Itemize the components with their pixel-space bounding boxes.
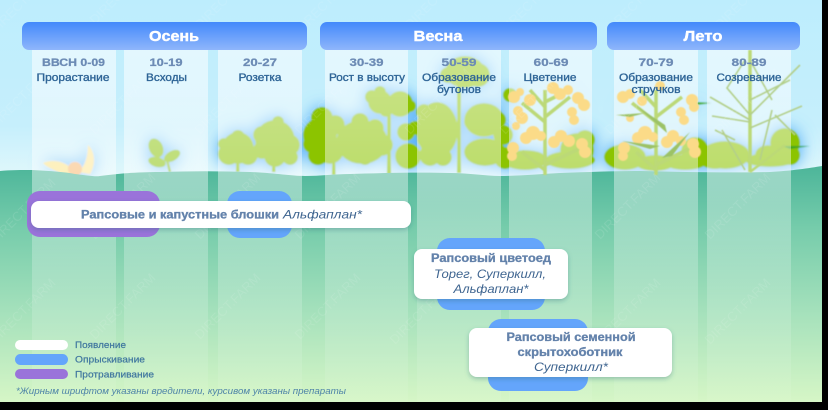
season header: spring: Весна <box>414 28 463 45</box>
pest bar: flea beetles <box>27 191 411 238</box>
watermarks: DIRECT.FARM <box>402 65 473 137</box>
plant: stem growth <box>303 86 422 175</box>
season header: summer: Лето <box>684 28 722 45</box>
stage label: 0-09: Прорастание <box>36 72 110 84</box>
watermarks: DIRECT.FARM <box>87 65 158 137</box>
pest bar: flea beetles: Альфаплан* <box>282 208 362 222</box>
stage label: 60-69 <box>524 57 576 84</box>
legend: Опрыскивание <box>75 354 145 366</box>
pest bar: pollen beetle: Торег, Суперкилл, <box>434 267 546 281</box>
stage label: 80-89 <box>716 57 782 84</box>
watermarks: DIRECT.FARM <box>702 170 773 242</box>
stage label: 70-79 <box>619 57 693 96</box>
stage label: 50-59: бутонов <box>437 84 481 96</box>
plant: budding <box>416 56 516 173</box>
plants layer <box>43 56 810 176</box>
plant: germination <box>43 145 94 176</box>
stage label: 0-09: ВВСН 0-09 <box>42 57 105 69</box>
spears <box>690 102 810 149</box>
stage label: 50-59 <box>422 57 496 96</box>
stage label: 70-79: 70-79 <box>638 57 674 69</box>
stage label: 30-39 <box>329 57 406 84</box>
plant: rosette <box>218 116 300 172</box>
stage label: 50-59: Образование <box>422 72 496 84</box>
stage label: 50-59: 50-59 <box>442 57 476 69</box>
stage label: 0-09 <box>36 57 110 84</box>
stage label: 20-27: 20-27 <box>243 57 277 69</box>
stage label: 70-79: Образование <box>619 72 693 84</box>
pest bar: seed weevil: Рапсовый семенной <box>506 330 636 344</box>
legend: Появление <box>75 340 126 351</box>
watermarks: DIRECT.FARM <box>192 270 263 342</box>
stage label: 80-89: Созревание <box>716 72 782 84</box>
pest bar: pollen beetle <box>414 238 568 310</box>
sky background <box>0 0 822 180</box>
watermarks: DIRECT.FARM <box>702 275 773 347</box>
watermarks: DIRECT.FARM <box>592 170 663 242</box>
pest bar: pollen beetle: Рапсовый цветоед <box>431 251 551 265</box>
season header: autumn <box>22 22 307 50</box>
watermarks: DIRECT.FARM <box>192 65 263 137</box>
watermarks: DIRECT.FARM <box>497 65 568 137</box>
watermarks: DIRECT.FARM <box>592 275 663 347</box>
watermarks: DIRECT.FARM <box>292 170 363 242</box>
watermarks: DIRECT.FARM <box>712 65 783 137</box>
watermarks: DIRECT.FARM <box>292 270 363 342</box>
plant leaves: ripening <box>700 128 800 169</box>
stage label: 30-39: 30-39 <box>350 57 384 69</box>
legend <box>15 340 154 380</box>
watermarks: DIRECT.FARM <box>87 170 158 242</box>
stage columns <box>32 50 791 402</box>
stage label: 20-27 <box>238 57 282 84</box>
pest bar: seed weevil: Суперкилл* <box>534 360 608 374</box>
flowers and stems: pods <box>616 81 701 175</box>
stage label: 80-89: 80-89 <box>732 57 766 69</box>
ground <box>0 166 822 402</box>
pest bar: seed weevil: скрытохоботник <box>518 345 624 359</box>
stage label: 60-69: 60-69 <box>534 57 568 69</box>
plant leaves: pods <box>604 137 709 171</box>
stage label: 30-39: Рост в высоту <box>329 72 406 84</box>
stage label: 70-79: стручков <box>632 84 681 96</box>
watermarks: DIRECT.FARM <box>87 270 158 342</box>
pest bar: flea beetles: Рапсовые и капустные блошки <box>81 208 279 222</box>
stage label: 10-19: 10-19 <box>150 57 182 69</box>
legend: Протравливание <box>75 370 154 380</box>
season header: summer <box>607 22 800 50</box>
plant leaves: flowering <box>502 88 595 170</box>
pest bar: seed weevil <box>469 319 672 391</box>
season header: spring <box>320 22 597 50</box>
flowers and stems: flowering <box>507 82 591 175</box>
stage label: 10-19: Всходы <box>146 72 187 84</box>
stems: ripening <box>710 50 802 172</box>
blue halos near flowers <box>500 75 701 145</box>
watermarks: DIRECT.FARM <box>292 65 363 137</box>
season header: autumn: Осень <box>149 28 199 45</box>
watermarks: DIRECT.FARM <box>602 65 673 137</box>
stage label: 60-69: Цветение <box>524 72 576 84</box>
footnote: *Жирным шрифтом указаны вредители, курсивом указаны препараты <box>16 386 346 397</box>
watermarks: DIRECT.FARM <box>192 170 263 242</box>
watermarks: DIRECT.FARM <box>387 275 458 347</box>
stage label: 10-19 <box>146 57 187 84</box>
pest bar: pollen beetle: Альфаплан* <box>452 282 529 296</box>
plant: sprout <box>145 136 182 172</box>
stage label: 20-27: Розетка <box>238 72 282 84</box>
